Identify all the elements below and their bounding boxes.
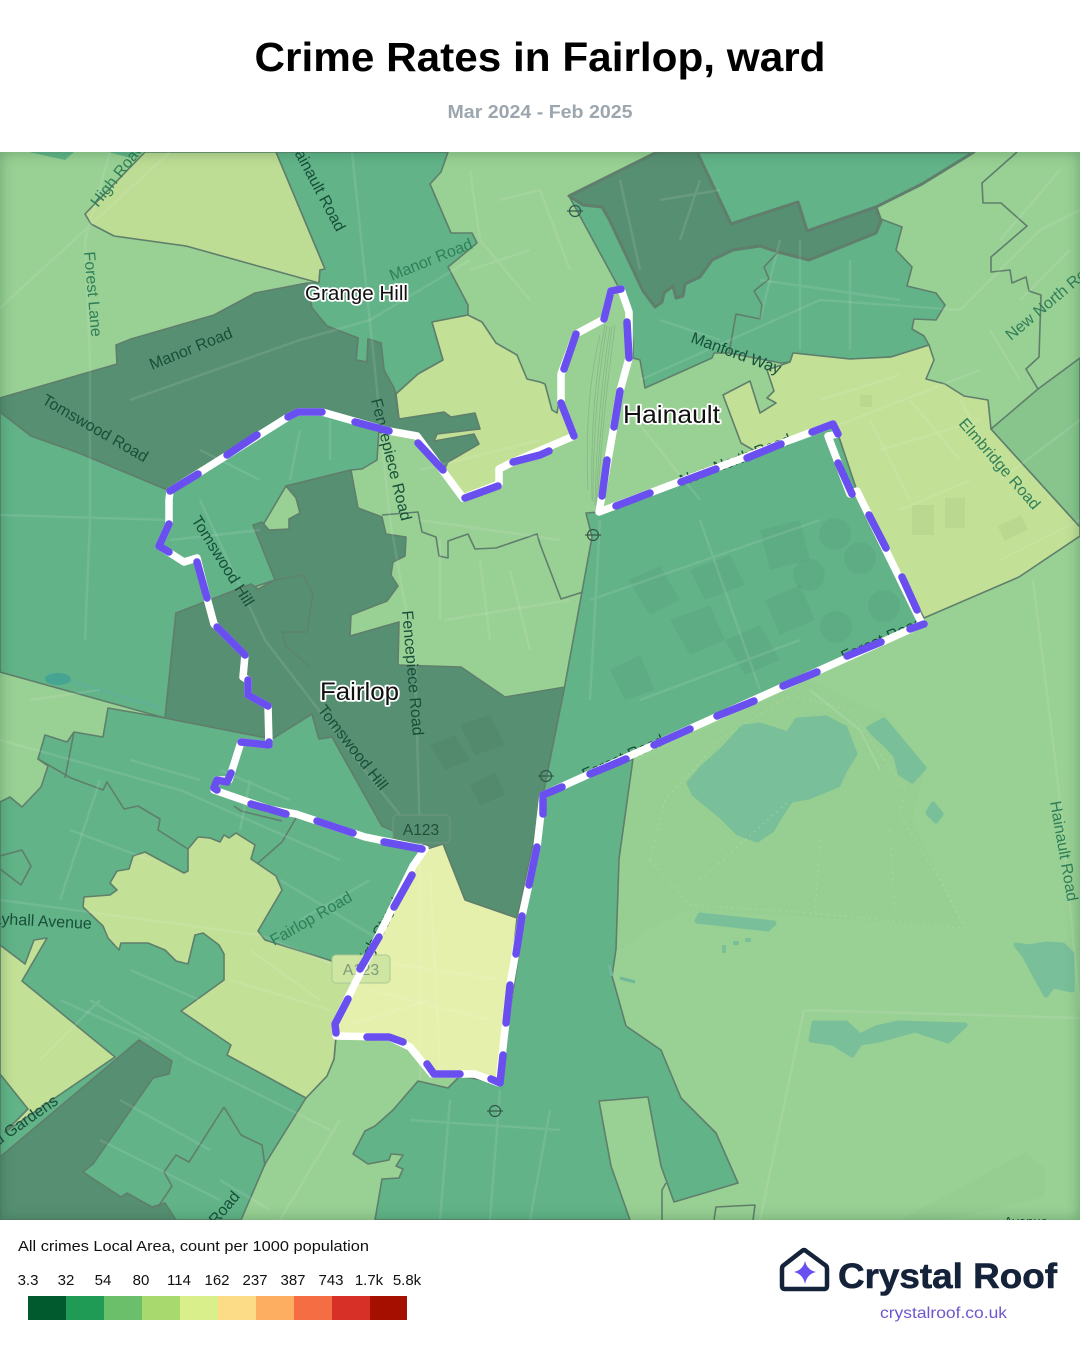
place: Hainault: Hainault xyxy=(623,401,720,429)
area: Hainault yellow xyxy=(723,345,1080,618)
legend values: 32 xyxy=(58,1272,74,1289)
place labels xyxy=(305,283,720,706)
place: Grange Hill: Grange Hill xyxy=(305,283,408,305)
map edge vignette xyxy=(0,152,1080,1220)
label: Forest Road east: Forest Road xyxy=(839,614,926,666)
label: Tomswood Hill upper: Tomswood Hill xyxy=(188,513,257,610)
area: Grange Hill yellow xyxy=(396,315,574,498)
shield: A123 north: A123 xyxy=(403,822,439,839)
buildings and circular tanks xyxy=(430,395,1028,805)
area: south-central green xyxy=(353,759,738,1220)
legend values: 1.7k xyxy=(355,1272,384,1289)
label: High Street: High Street xyxy=(353,894,405,973)
label: Tomswood Road: Tomswood Road xyxy=(39,392,151,466)
legend values: 743 xyxy=(318,1272,344,1289)
label: Hainault Road east: Hainault Road xyxy=(1046,800,1080,903)
wordmark: Crystal Roof xyxy=(838,1257,1057,1296)
shield: A123 south: A123 xyxy=(343,962,379,979)
area: south-west yellow wedge xyxy=(0,938,115,1132)
heading: Crime Rates in Fairlop, ward xyxy=(254,34,826,80)
legend values: 54 xyxy=(95,1272,111,1289)
choropleth map xyxy=(0,152,1080,1220)
icon: house with star xyxy=(782,1250,827,1289)
legend values: 80 xyxy=(133,1272,149,1289)
map base xyxy=(0,152,1080,1220)
legend values: 237 xyxy=(242,1272,268,1289)
legend values: 114 xyxy=(167,1272,191,1289)
area: parkland tint xyxy=(614,680,962,952)
shield: A123 north xyxy=(393,815,450,843)
legend xyxy=(18,1238,422,1320)
place: Fairlop: Fairlop xyxy=(320,678,399,706)
date range: Mar 2024 - Feb 2025 xyxy=(448,101,632,122)
label: New North Road south: New North Road xyxy=(677,431,794,490)
park footpaths xyxy=(650,695,965,928)
label: Fencepiece Road upper: Fencepiece Road xyxy=(367,397,414,523)
website: crystalroof.co.uk xyxy=(880,1305,1008,1322)
legend values xyxy=(18,1272,422,1289)
label: Fencepiece Road lower: Fencepiece Road xyxy=(398,610,426,736)
area: top-left fragments xyxy=(29,152,74,160)
station symbols xyxy=(487,206,601,1116)
area: north top green xyxy=(697,152,974,231)
area: Hainault north darkest xyxy=(569,152,881,307)
area outlines xyxy=(0,152,1041,1220)
label: Tomswood Hill lower: Tomswood Hill xyxy=(314,702,391,794)
ward boundary: Fairlop xyxy=(159,289,924,1083)
legend values: 387 xyxy=(280,1272,306,1289)
label: Manor Road east: Manor Road xyxy=(387,236,475,285)
area: west green xyxy=(0,412,379,718)
road shields xyxy=(332,815,450,983)
areas xyxy=(0,152,1080,1220)
area: south-west dark xyxy=(0,1040,176,1220)
label: Manford Way: Manford Way xyxy=(689,330,783,378)
area: Fairlop pale yellow xyxy=(336,844,517,1083)
area: north-west yellow field xyxy=(85,152,325,283)
legend values: 162 xyxy=(204,1272,230,1289)
area: Grange Hill green xyxy=(276,152,477,394)
legend title: All crimes Local Area, count per 1000 population xyxy=(18,1238,369,1255)
label: Elmbridge Road: Elmbridge Road xyxy=(955,415,1043,513)
shield: A123 south xyxy=(332,955,390,983)
road network xyxy=(0,152,1080,1220)
label: Forest Road west: Forest Road xyxy=(580,732,667,784)
label: Forest Lane: Forest Lane xyxy=(80,251,104,338)
legend colour scale xyxy=(28,1296,407,1320)
area: Hainault north green xyxy=(569,190,945,388)
logo: Crystal Roof xyxy=(782,1250,1057,1322)
area: east green xyxy=(991,358,1080,527)
area: Manor Road dark xyxy=(0,283,480,491)
label: Manor Road west: Manor Road xyxy=(147,325,235,374)
area: Hainault industrial green xyxy=(543,424,922,795)
water bodies xyxy=(45,672,1072,1055)
label: Fairlop Road: Fairlop Road xyxy=(268,889,355,949)
footer xyxy=(18,1238,1058,1322)
legend values: 5.8k xyxy=(393,1272,422,1289)
railway tracks xyxy=(587,325,615,510)
legend values: 3.3 xyxy=(18,1272,38,1289)
area: south-east parkland tint xyxy=(900,1152,1045,1220)
title xyxy=(254,34,826,122)
area: Fairlop Road yellow xyxy=(83,833,360,1098)
area: Fairlop dark xyxy=(165,470,565,918)
area: south-west green xyxy=(0,708,427,1220)
